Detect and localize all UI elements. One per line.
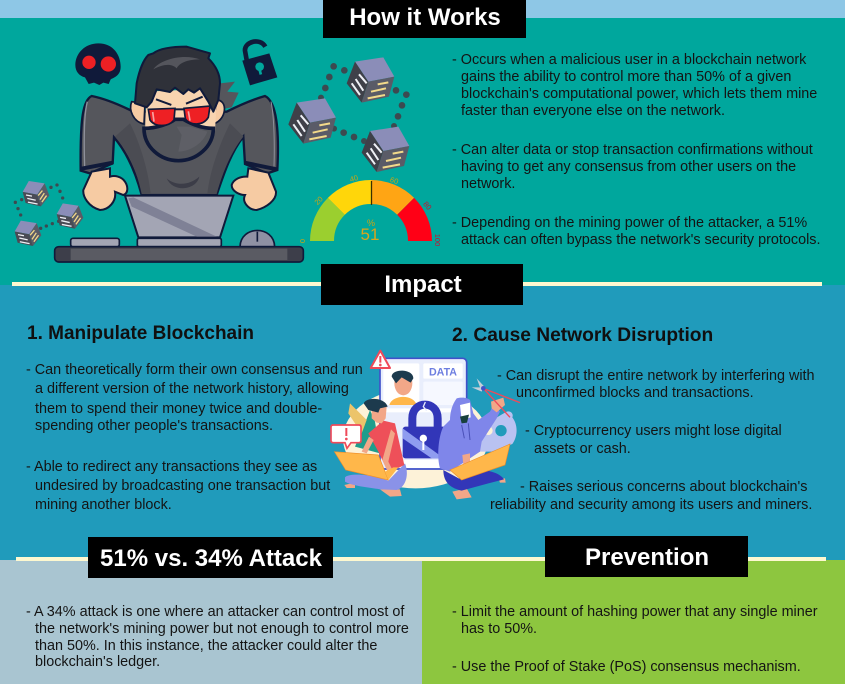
icon: skull — [75, 43, 121, 85]
text block: how it works: - Depending on the mining power of the attacker, a 51% — [452, 215, 807, 231]
ears — [131, 100, 224, 124]
heading: Prevention: Prevention — [585, 544, 709, 571]
text block: network disruption: reliability and security among its users and miners. — [490, 497, 812, 513]
glasses — [175, 106, 184, 112]
heading: 51% vs. 34% Attack — [88, 537, 333, 578]
icon: warning triangle — [371, 351, 390, 368]
chart: hash power gauge at 51 percent — [298, 173, 442, 246]
text block: prevention: has to 50%. — [461, 621, 537, 637]
text block: how it works: - Can alter data or stop transaction confirmations without — [452, 142, 813, 158]
text block: manipulate blockchain: them to spend their money twice and double- — [35, 401, 322, 417]
chart: hash power gauge at 51 percent: 60 — [389, 175, 400, 186]
text block: manipulate blockchain: - Able to redirect any transactions they see as — [26, 459, 317, 475]
heading: Cause Network Disruption: 2. Cause Network Disruption — [452, 325, 713, 346]
chart: hash power gauge at 51 percent: 20 — [313, 195, 325, 207]
icon: cutters — [472, 378, 520, 417]
mask — [144, 119, 213, 161]
panel: impact — [0, 285, 845, 561]
text block: manipulate blockchain: - Can theoretically form their own consensus and run — [26, 362, 363, 378]
icon: blockchain cubes left — [14, 181, 83, 246]
text block: how it works — [452, 52, 820, 248]
panel: how it works — [0, 18, 845, 285]
text block: manipulate blockchain: mining another block. — [35, 497, 172, 513]
heading: Manipulate Blockchain: 1. Manipulate Blockchain — [27, 323, 254, 344]
data card: DATA — [429, 366, 457, 378]
illustration: hacker at laptop — [14, 41, 410, 262]
face — [145, 88, 217, 132]
hacker figure — [81, 47, 278, 210]
illustration: data breach — [331, 351, 520, 499]
text block: network disruption: - Raises serious concerns about blockchain's — [520, 479, 808, 495]
chart: hash power gauge at 51 percent: 40 — [349, 173, 359, 184]
heading: How it Works: How it Works — [349, 4, 501, 31]
hair — [135, 47, 220, 112]
chart: hash power gauge at 51 percent: 100 — [433, 234, 442, 246]
text block: how it works: faster than everyone else on the network. — [461, 103, 725, 119]
eyebrows — [156, 97, 203, 105]
text block: network disruption: - Can disrupt the entire network by interfering with — [497, 368, 815, 384]
heading: 51% vs. 34% Attack: 51% vs. 34% Attack — [100, 545, 323, 572]
chart: hash power gauge at 51 percent: 80 — [421, 200, 434, 212]
text block: 34% attack: the network's mining power but not enough to control more — [35, 621, 409, 637]
heading: How it Works — [323, 0, 526, 38]
text block: prevention — [452, 604, 818, 675]
panel: 51% vs 34% attack — [0, 560, 422, 684]
icon: broken padlock — [403, 402, 452, 458]
chart: hash power gauge at 51 percent: 51 — [361, 225, 379, 244]
text block: how it works: blockchain's computational power, which lets them mine — [461, 86, 817, 102]
text block: manipulate blockchain: undesired by broadcasting one transaction but — [35, 478, 330, 494]
text block: 34% attack: - A 34% attack is one where an attacker can control most of — [26, 604, 405, 620]
text block: network disruption: assets or cash. — [534, 441, 631, 457]
chart: hash power gauge at 51 percent: 0 — [298, 239, 307, 243]
heading: Prevention — [545, 536, 748, 577]
text block: manipulate blockchain: spending other people's transactions. — [35, 418, 273, 434]
text block: network disruption — [490, 368, 815, 513]
text block: how it works: gains the ability to control more than 50% of a given — [461, 69, 791, 85]
person with laptop — [331, 399, 407, 497]
text block: how it works: having to get any consensus from other users on the — [461, 159, 796, 175]
hands — [83, 168, 127, 210]
heading: Impact: Impact — [384, 271, 462, 298]
text block: 34% attack — [26, 604, 409, 670]
heading: Impact — [321, 264, 523, 305]
chart: hash power gauge at 51 percent: % — [367, 218, 375, 228]
data card — [380, 358, 467, 469]
panel: prevention — [422, 560, 845, 684]
text block: how it works: attack can often bypass the network's security protocols. — [461, 232, 820, 248]
icon: open padlock — [242, 41, 277, 85]
text block: network disruption: unconfirmed blocks and transactions. — [516, 385, 754, 401]
text block: how it works: - Occurs when a malicious user in a blockchain network — [452, 52, 807, 68]
text block: manipulate blockchain: a different version of the network history, allowing — [35, 381, 349, 397]
text block: prevention: - Limit the amount of hashing power that any single miner — [452, 604, 818, 620]
laptop and desk — [55, 196, 303, 262]
text block: 34% attack: blockchain's ledger. — [35, 654, 160, 670]
text block: 34% attack: than 50%. In this instance, the attacker could alter the — [35, 638, 377, 654]
text block: how it works: network. — [461, 176, 515, 192]
top band — [0, 0, 845, 18]
text block: prevention: - Use the Proof of Stake (PoS) consensus mechanism. — [452, 659, 801, 675]
icon: blockchain cubes right — [288, 57, 410, 172]
icon: alert speech bubble — [331, 425, 361, 448]
text block: network disruption: - Cryptocurrency users might lose digital — [525, 423, 782, 439]
hooded attacker with laptop — [438, 378, 520, 499]
text block: manipulate blockchain — [26, 362, 363, 513]
